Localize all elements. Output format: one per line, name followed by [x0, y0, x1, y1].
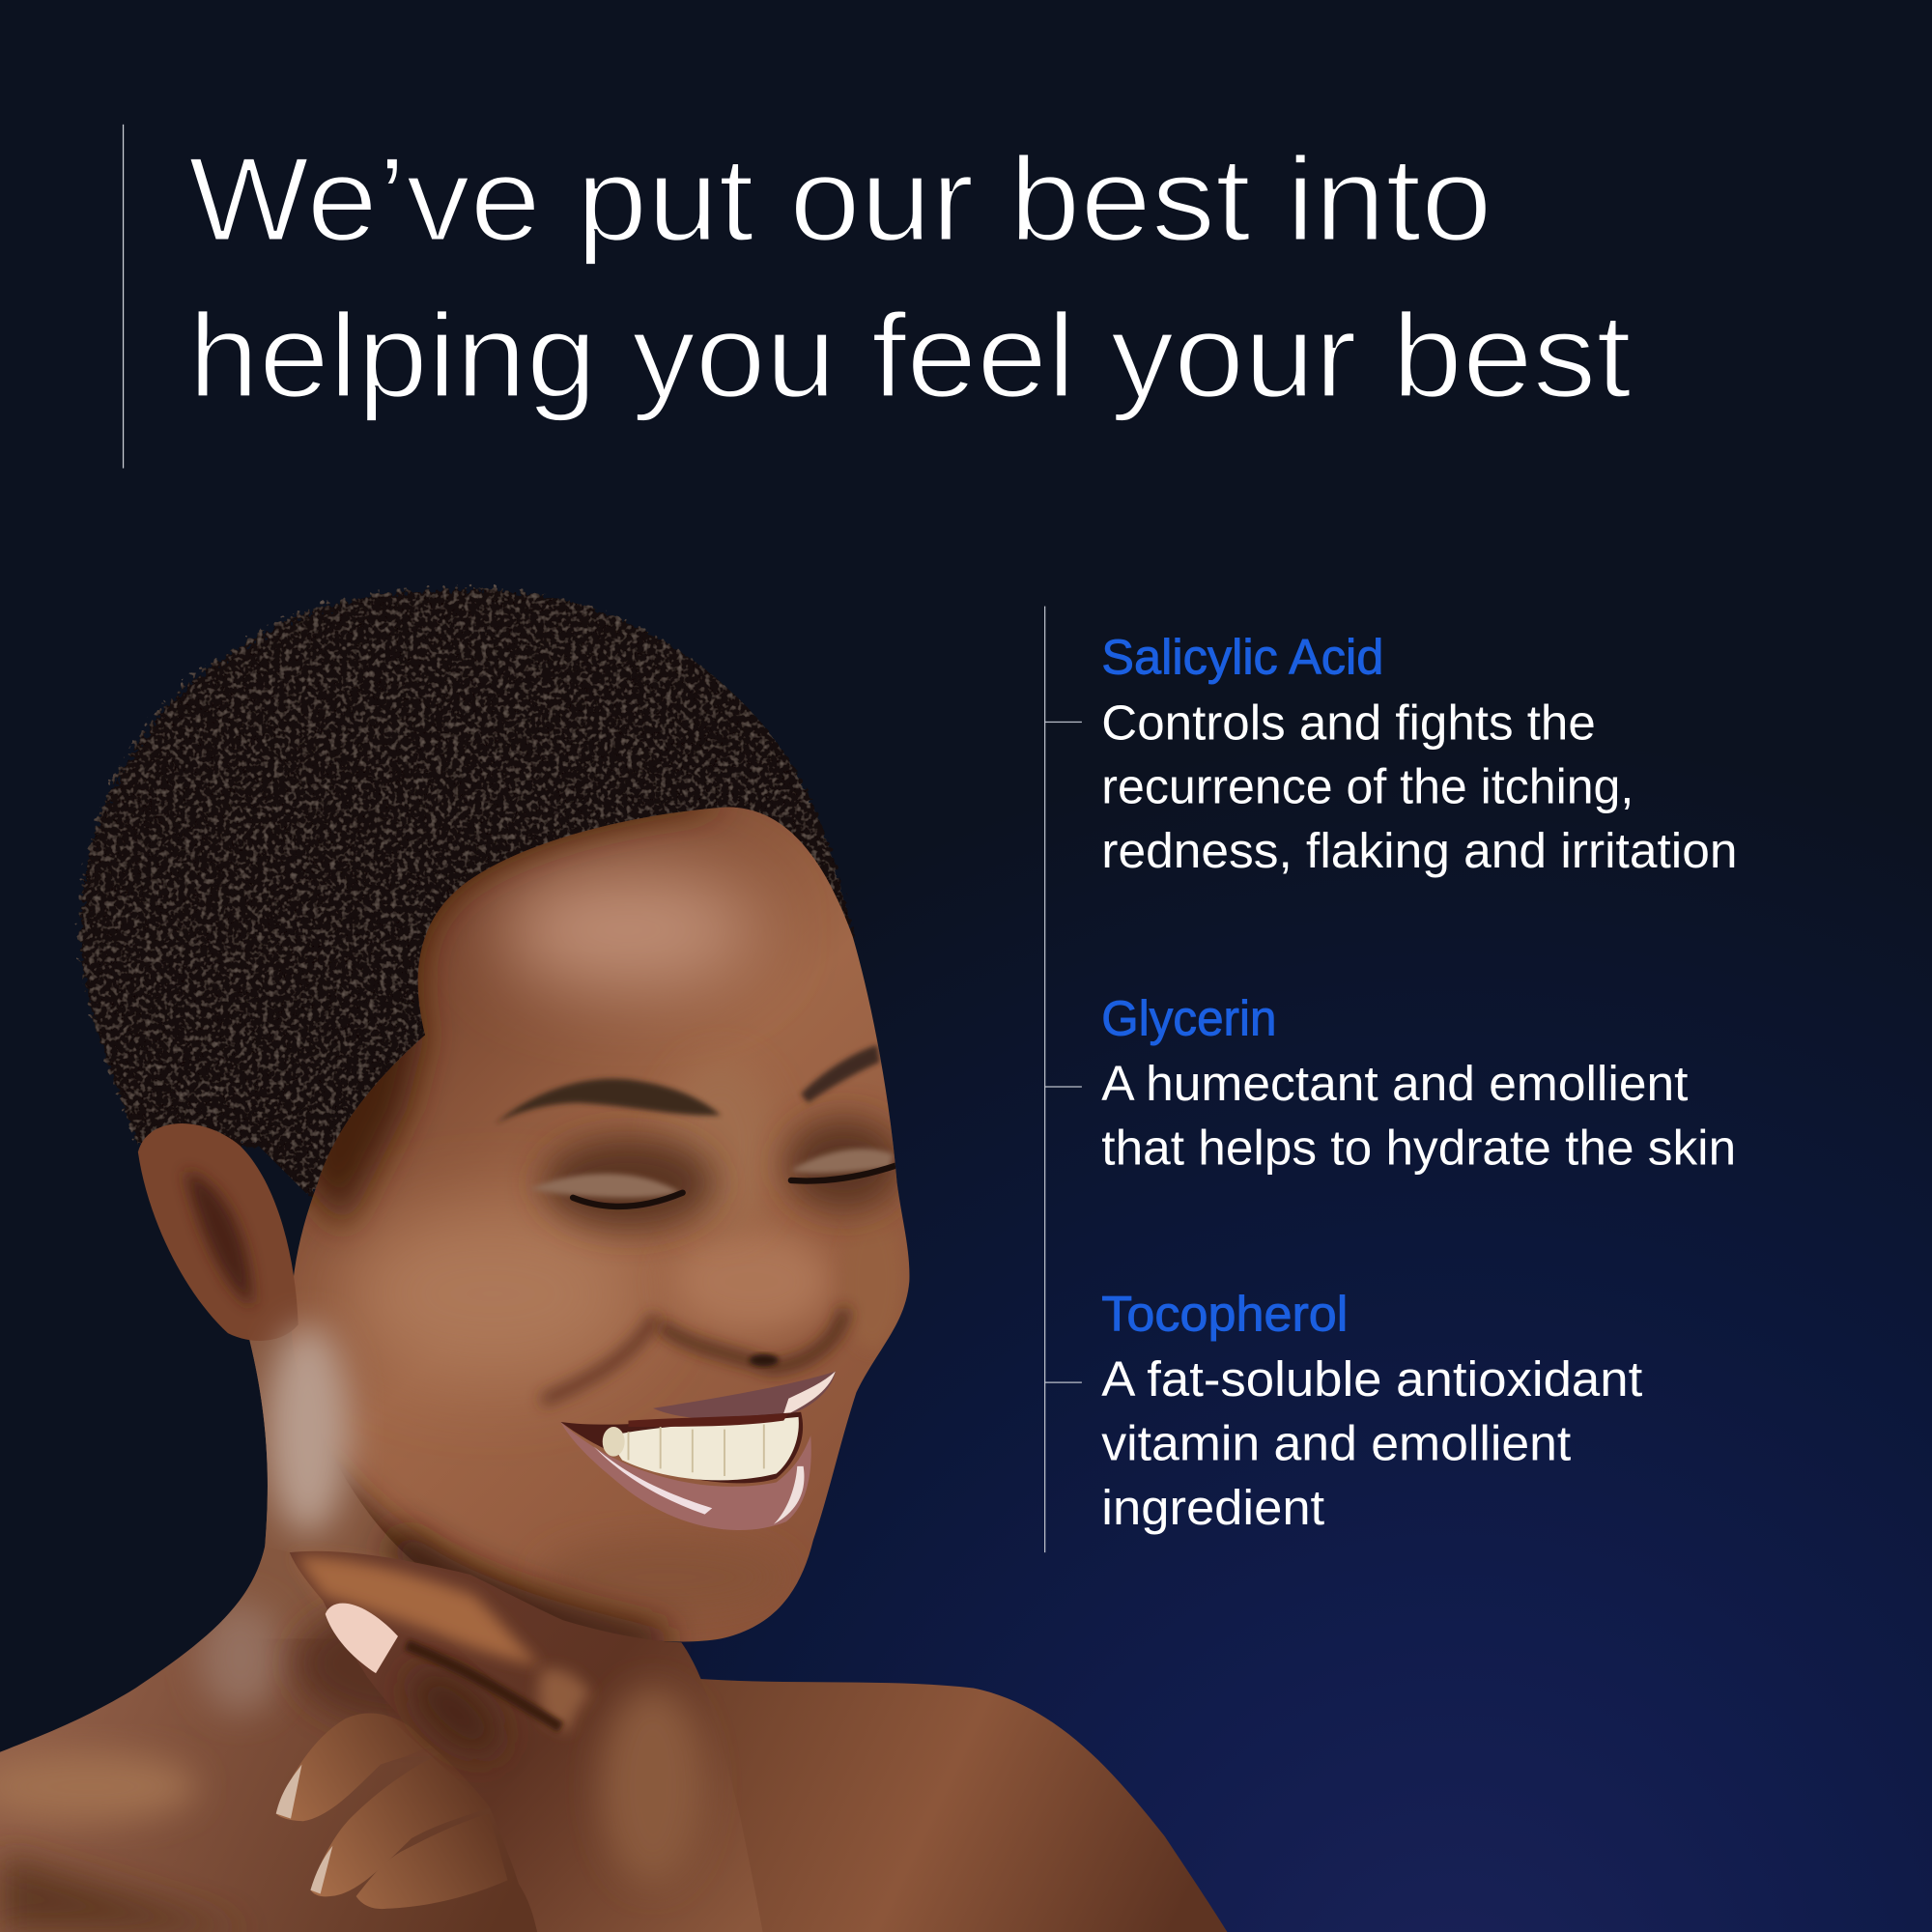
hairline shadow: [296, 788, 727, 1233]
lip corner shine: [782, 1372, 836, 1417]
shadow under jaw: [394, 1540, 666, 1645]
fingernail edges: [276, 1765, 301, 1819]
inner ear: [185, 1171, 252, 1306]
left eyebrow: [496, 1079, 721, 1123]
face: [294, 808, 910, 1642]
lower lip right shine: [774, 1466, 804, 1524]
ingredient: Salicylic Acid: recurrence of the itching,: [1101, 759, 1634, 814]
ingredient: Tocopherol: vitamin and emollient: [1101, 1415, 1571, 1470]
ingredient: Glycerin: [1101, 990, 1736, 1175]
ingredient: Glycerin: A humectant and emollient: [1101, 1056, 1688, 1111]
lower lip: [560, 1422, 811, 1530]
back of hand light: [601, 1688, 705, 1886]
ingredient: Tocopherol: ingredient: [1101, 1480, 1324, 1535]
neck and chest: [0, 1331, 537, 1932]
right cheek: [861, 1302, 906, 1350]
ingredient: Salicylic Acid: Salicylic Acid: [1101, 630, 1383, 685]
curled finger: [538, 1669, 591, 1732]
right eyebrow: [801, 1045, 880, 1103]
left lashes: [573, 1193, 683, 1207]
ingredient: Glycerin: that helps to hydrate the skin: [1101, 1120, 1736, 1175]
thumb crease shadow: [407, 1645, 560, 1727]
hair: [79, 589, 853, 1195]
title: helping you feel your best: [188, 290, 1632, 423]
cheek glow: [345, 1208, 640, 1380]
ingredient: Salicylic Acid: redness, flaking and irritation: [1101, 823, 1737, 878]
lower face shadow: [338, 1463, 599, 1629]
gum shade: [629, 1413, 788, 1427]
title: [188, 133, 1632, 423]
eye socket shade left: [542, 1136, 715, 1230]
ingredient: Salicylic Acid: Controls and fights the: [1101, 695, 1596, 750]
ingredient: Tocopherol: A fat-soluble antioxidant: [1101, 1351, 1642, 1406]
right lashes: [791, 1166, 895, 1180]
upper lip: [653, 1372, 836, 1420]
eye socket shade right: [784, 1118, 903, 1211]
shoulder: [666, 1678, 1227, 1932]
ingredient: Glycerin: Glycerin: [1101, 990, 1276, 1045]
ingredient: Salicylic Acid: [1101, 630, 1737, 878]
fingers: [276, 1713, 508, 1909]
right eyelid: [791, 1149, 894, 1173]
hand and thumb: [290, 1551, 763, 1932]
teeth: [603, 1417, 799, 1480]
ingredient: Tocopherol: Tocopherol: [1101, 1287, 1348, 1342]
neck and jaw highlight: [267, 1324, 350, 1534]
mouth interior: [560, 1412, 803, 1483]
title: We’ve put our best into: [188, 133, 1492, 267]
nostril: [750, 1354, 779, 1367]
nasolabial fold: [542, 1316, 656, 1401]
index finger light: [296, 1556, 542, 1665]
ear: [138, 1123, 298, 1341]
lower lip shine: [594, 1446, 712, 1515]
photo: smiling woman: [0, 589, 1227, 1932]
nose: [671, 1230, 832, 1333]
ingredient: Tocopherol: [1101, 1287, 1642, 1535]
left eyelid: [529, 1174, 680, 1198]
ingredient rule with ticks: [1044, 607, 1082, 1552]
tooth gaps: [629, 1424, 764, 1476]
thumb dark knuckle: [397, 1656, 515, 1770]
thumbnail: [326, 1604, 398, 1673]
forehead highlight: [499, 868, 757, 992]
title rule: [123, 125, 124, 469]
